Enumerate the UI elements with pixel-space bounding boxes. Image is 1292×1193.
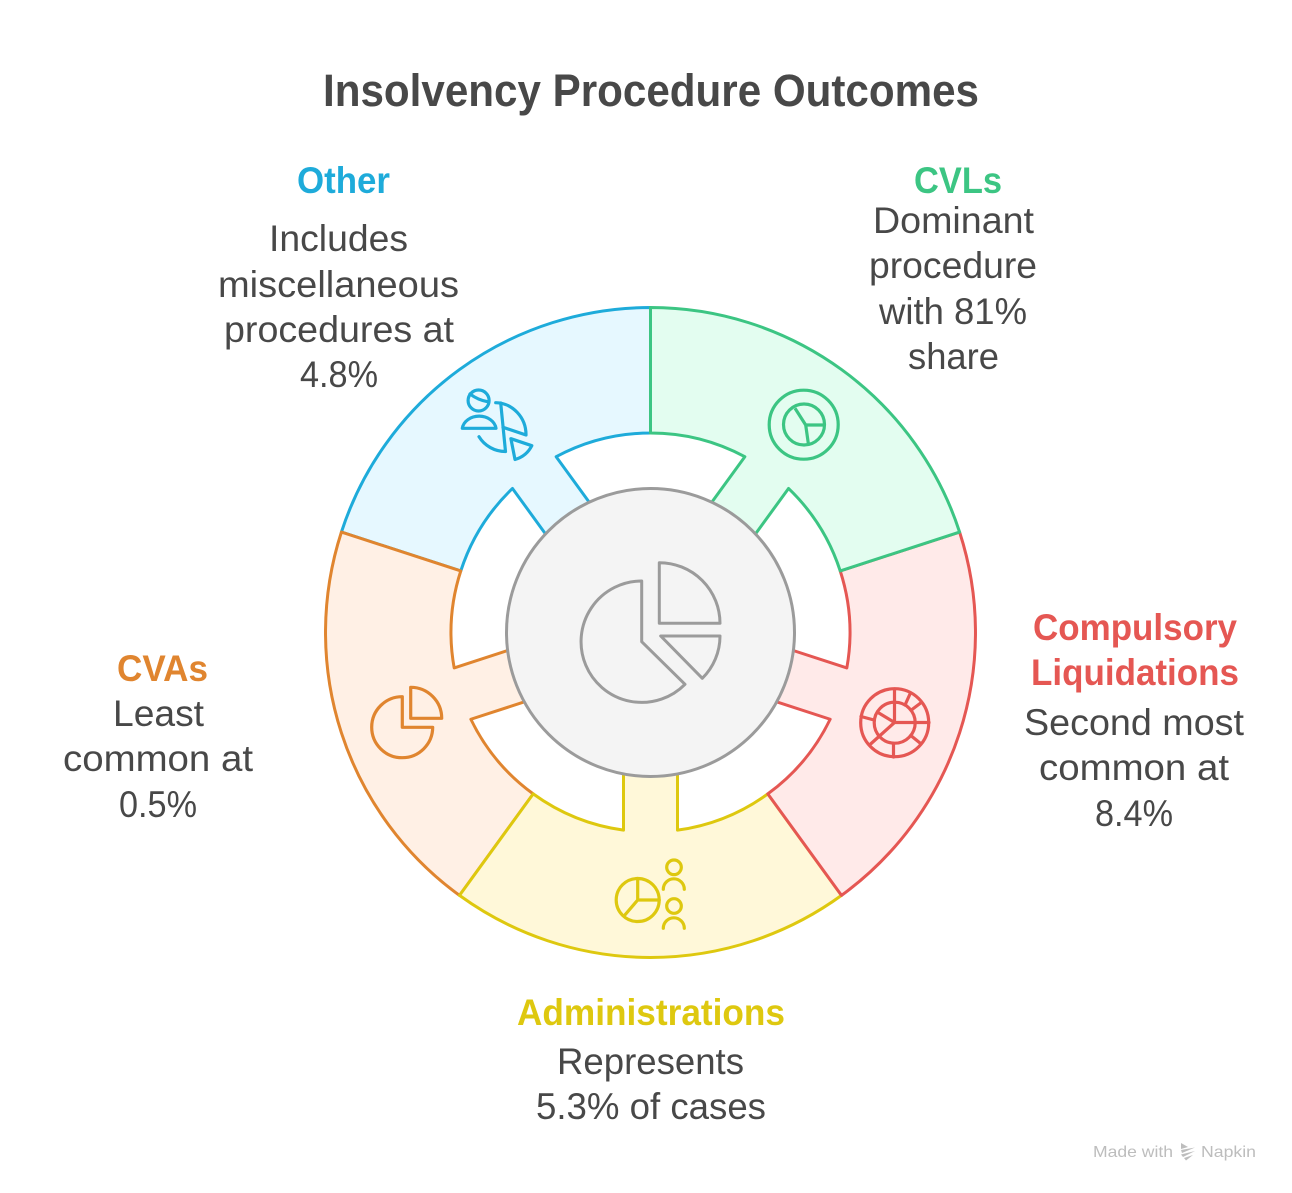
icon: center pie chart (581, 563, 720, 702)
label: Compulsory Liquidations: Second most (1024, 702, 1244, 743)
label: CVLs: with 81% (878, 291, 1027, 332)
icon: CVAs pie (372, 687, 442, 758)
label: Other: procedures at (224, 309, 454, 350)
label: CVAs: common at (63, 738, 253, 779)
center circle (506, 488, 794, 776)
icon: Compulsory Liquidations radial chart (861, 689, 929, 757)
icon: Other person and pie (462, 390, 532, 460)
label: Compulsory Liquidations: Liquidations (1031, 652, 1239, 693)
label: Other: miscellaneous (218, 264, 459, 305)
title: Insolvency Procedure Outcomes (323, 65, 979, 116)
label: CVLs: procedure (869, 245, 1037, 286)
segment: CVAs (326, 532, 535, 895)
label: CVLs (869, 160, 1037, 377)
segment: Compulsory Liquidations (766, 532, 975, 895)
segment: CVLs (650, 308, 960, 571)
label: CVAs: Least (113, 693, 204, 734)
label: Other (218, 160, 459, 395)
label: Compulsory Liquidations (1024, 607, 1244, 834)
label: CVLs: CVLs (914, 160, 1002, 201)
label: Other: Includes (269, 218, 408, 259)
label: Administrations: Administrations (517, 992, 785, 1033)
watermark: Made with Napkin: Napkin (1201, 1144, 1256, 1161)
label: CVAs: 0.5% (119, 784, 197, 825)
segment: Other (341, 307, 650, 571)
watermark: Made with Napkin: Made with (1093, 1144, 1173, 1161)
label: Other: Other (297, 160, 390, 201)
label: CVLs: share (908, 336, 999, 377)
label: CVAs (63, 648, 253, 825)
icon: Administrations pie and people (616, 860, 684, 928)
label: Compulsory Liquidations: 8.4% (1095, 793, 1173, 834)
label: CVAs: CVAs (117, 648, 208, 689)
segment: Administrations (460, 762, 842, 957)
watermark: Made with Napkin (1093, 1143, 1256, 1161)
icon: CVLs pie in ring (769, 390, 838, 459)
label: CVLs: Dominant (873, 200, 1034, 241)
label: Compulsory Liquidations: Compulsory (1033, 607, 1237, 648)
label: Other: 4.8% (300, 354, 378, 395)
label: Compulsory Liquidations: common at (1039, 747, 1229, 788)
label: Administrations (517, 992, 785, 1127)
label: Administrations: Represents (557, 1041, 744, 1082)
label: Administrations: 5.3% of cases (536, 1086, 766, 1127)
